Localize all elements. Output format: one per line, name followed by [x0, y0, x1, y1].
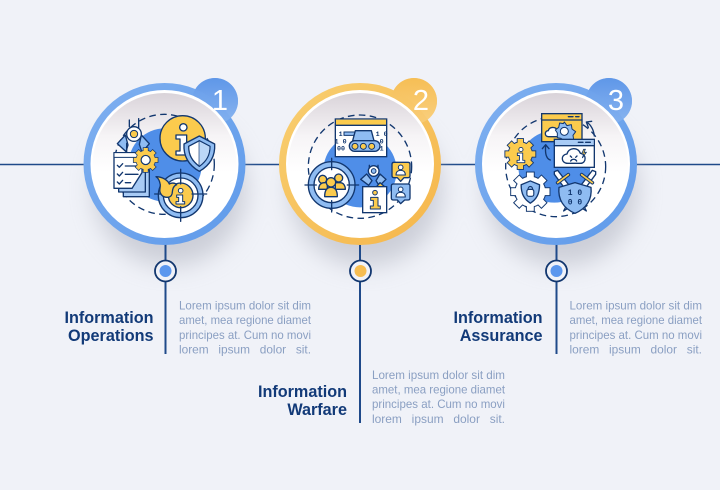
- white gear: [511, 172, 549, 211]
- number 2: 2: [413, 85, 429, 117]
- blue chat bubble: [391, 184, 410, 204]
- target with people: [305, 158, 359, 212]
- circle 3: [475, 78, 637, 245]
- text block 2: Lorem ipsum dolor sit dim: [372, 368, 505, 382]
- yellow window: [542, 114, 582, 142]
- text block 1: [179, 298, 312, 356]
- text block 2: principes at. Cum no movi: [372, 397, 505, 411]
- tank window: 1: [339, 130, 343, 138]
- flame: [156, 177, 177, 197]
- tank window: [335, 119, 388, 157]
- text block 3: [570, 298, 703, 356]
- step 1 connector: [155, 240, 176, 354]
- arrows: [542, 121, 594, 160]
- shield: [184, 136, 215, 171]
- shadows: [94, 114, 638, 266]
- circle 1: [84, 78, 246, 245]
- icon: information assurance: [505, 114, 606, 217]
- icon: information warfare: [305, 115, 412, 218]
- shield: 1 0: [568, 189, 582, 198]
- tank window: 1: [380, 145, 384, 153]
- heading: Information Warfare: Information: [258, 383, 347, 401]
- heading: Information Operations: Operations: [68, 327, 154, 345]
- heading: Information Operations: Information: [64, 309, 154, 327]
- info card: [363, 187, 387, 213]
- timeline line: [0, 164, 720, 166]
- target: [155, 169, 207, 221]
- shield: 0 0: [568, 199, 582, 208]
- circle 2: [279, 78, 441, 245]
- text block 1: lorem ipsum dolor sit.: [179, 342, 311, 356]
- robot arm: [117, 135, 149, 152]
- tank window: 1 0: [335, 137, 347, 145]
- text block 1: amet, mea regione diamet: [179, 313, 312, 327]
- swords: [554, 170, 596, 211]
- heading: Information Warfare: Warfare: [287, 401, 347, 419]
- text block 2: amet, mea regione diamet: [372, 382, 506, 396]
- icon: information operations: [114, 114, 215, 221]
- tank window: 1 0: [376, 130, 388, 138]
- text block 3: Lorem ipsum dolor sit dim: [570, 298, 702, 312]
- gear: [134, 148, 158, 172]
- text block 3: amet, mea regione diamet: [570, 313, 703, 327]
- yellow gear: [505, 139, 535, 169]
- text block 3: principes at. Cum no movi: [570, 328, 702, 342]
- step 2 connector: [350, 240, 371, 423]
- text block 1: principes at. Cum no movi: [179, 328, 311, 342]
- shield: [559, 183, 591, 213]
- text block 3: lorem ipsum dolor sit.: [570, 342, 702, 356]
- text block 1: Lorem ipsum dolor sit dim: [179, 298, 311, 312]
- tank window: 0: [380, 137, 384, 145]
- cloud window: [554, 139, 594, 167]
- info circle: [160, 116, 205, 161]
- number 1: 1: [212, 85, 228, 117]
- heading: Information Assurance: Assurance: [460, 327, 542, 345]
- tank window: 00: [337, 145, 345, 153]
- heading: Information Assurance: Information: [453, 309, 542, 327]
- text block 2: lorem ipsum dolor sit.: [372, 412, 505, 426]
- papers: [123, 170, 149, 197]
- text block 2: [372, 368, 506, 426]
- robot figure: [361, 165, 386, 187]
- step 3 connector: [546, 240, 567, 354]
- yellow chat bubble: [392, 162, 410, 181]
- number 3: 3: [608, 85, 624, 117]
